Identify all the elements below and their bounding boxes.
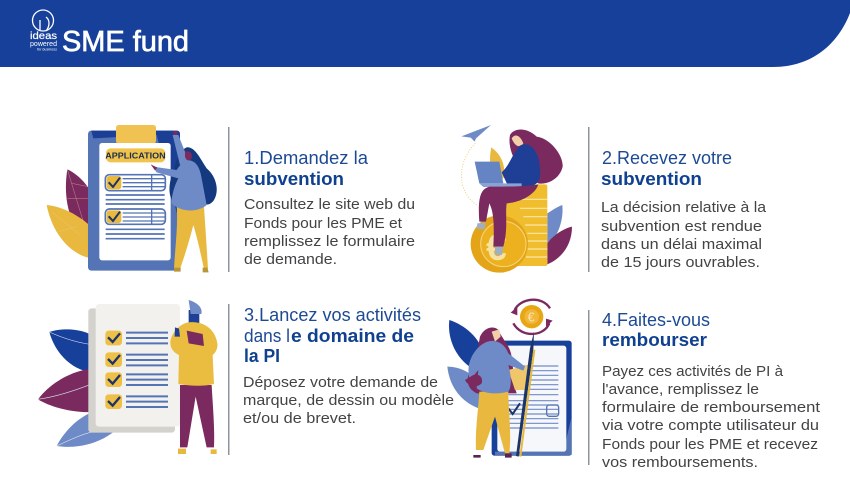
text block 2: [601, 147, 767, 271]
text block 4: 4.Faites-vous: [602, 309, 710, 330]
illustration: reimbursement form: €: [528, 310, 535, 324]
text block 2: 2.Recevez votre: [602, 147, 732, 168]
text block 2: subvention est rendue: [601, 218, 762, 235]
text block 1: de demande.: [244, 251, 337, 268]
illustration: checklist with man: [38, 300, 217, 454]
text block 4: vos remboursements.: [602, 454, 758, 471]
text block 3: e domaine de: [291, 325, 414, 346]
text block 3: dans l: [244, 325, 290, 346]
text block 1: Consultez le site web du: [244, 196, 415, 213]
text block 3: la PI: [244, 345, 280, 366]
text block 2: dans un délai maximal: [601, 236, 762, 253]
text block 1: subvention: [244, 168, 344, 189]
illustration: application clipboard: APPLICATION: [105, 150, 166, 160]
text block 4: via votre compte utilisateur du: [602, 417, 819, 434]
logo: [30, 10, 57, 52]
text block 1: Fonds pour les PME et: [244, 215, 403, 232]
text block 3: marque, de dessin ou modèle: [243, 392, 454, 409]
divider 4: [588, 310, 590, 465]
text block 1: remplissez le formulaire: [244, 233, 415, 250]
divider 3: [228, 304, 230, 455]
text block 4: formulaire de remboursement: [602, 399, 821, 416]
text block 3: 3.Lancez vos activités: [244, 304, 421, 325]
text block 4: Fonds pour les PME et recevez: [602, 436, 818, 453]
text block 4: rembourser: [602, 329, 707, 350]
text block 4: l'avance, remplissez le: [602, 381, 759, 398]
text block 2: de 15 jours ouvrables.: [601, 254, 760, 271]
illustration: euro coins with laptop: [461, 125, 572, 273]
logo: ideas: [30, 31, 57, 42]
text block 3: [243, 304, 454, 427]
text block 4: [602, 309, 821, 471]
header banner: [0, 0, 850, 67]
text block 3: Déposez votre demande de: [243, 374, 438, 391]
illustration: application clipboard: [47, 125, 217, 272]
illustration: euro coins with laptop: €: [486, 226, 507, 268]
text block 1: [244, 147, 415, 268]
text block 3: et/ou de brevet.: [243, 410, 356, 427]
divider 1: [228, 127, 230, 272]
text block 2: subvention: [601, 168, 702, 189]
text block 2: La décision relative à la: [601, 199, 767, 216]
logo: for business: [37, 46, 57, 52]
logo: powered: [30, 39, 57, 48]
text block 4: Payez ces activités de PI à: [602, 363, 784, 380]
divider 2: [588, 127, 590, 272]
text block 1: 1.Demandez la: [244, 147, 369, 168]
title: SME fund: SME fund: [62, 26, 189, 58]
illustration: reimbursement form: [447, 300, 572, 458]
